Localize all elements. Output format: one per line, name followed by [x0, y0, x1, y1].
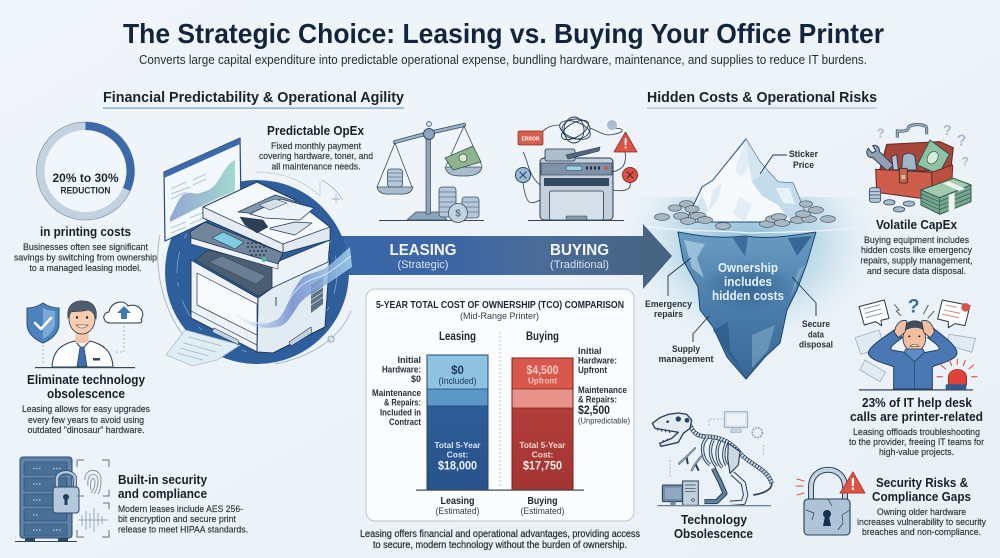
chart title: 5-YEAR TOTAL COST OF OWNERSHIP (TCO) COMPARISON [376, 300, 624, 311]
text: in printing costs: Businesses often see significant [23, 242, 148, 253]
printer paper [166, 330, 240, 366]
stat: donut 20% to 30% reduction: REDUCTION [60, 186, 110, 196]
leasing vs buying arrow [340, 224, 672, 289]
chart title [376, 300, 624, 322]
text: built-in security and compliance: release to meet HIPAA standards. [118, 524, 248, 536]
column headings: Buying [526, 331, 559, 343]
bar: leasing: Total 5-Year [434, 440, 481, 450]
heading: left section: Financial Predictability & Operational Agility [103, 89, 405, 106]
labels: leasing segments: Included in [380, 408, 421, 418]
callout: sticker price [760, 149, 818, 174]
text: eliminate technology obsolescence: outdated "dinosaur" hardware. [28, 425, 144, 436]
text: technology obsolescence: Technology [681, 512, 748, 527]
column headings: Leasing [439, 331, 476, 343]
bar: buying: Upfront [528, 376, 557, 386]
illustration: modern multifunction printer [158, 138, 352, 366]
labels: buying segments: & Repairs: [578, 394, 617, 404]
labels: leasing segments: Maintenance [372, 388, 421, 398]
text: security risks and compliance gaps: Owning older hardware [877, 507, 966, 518]
iceberg water glow [625, 197, 875, 402]
stat: donut 20% to 30% reduction: 20% to 30% [52, 171, 119, 185]
text: built-in security and compliance: Modern leases include AES 256- [118, 504, 243, 515]
labels: buying segments: Upfront [578, 365, 607, 375]
callout: supply management: Supply [672, 344, 701, 355]
analytics panel [164, 138, 241, 241]
labels: leasing segments: Initial [397, 355, 421, 365]
icon: toolbox with cash: ? [957, 133, 967, 150]
text: security risks and compliance gaps: increases vulnerability to security [857, 517, 986, 528]
labels: buying segments [578, 346, 630, 426]
text: in printing costs: in printing costs [40, 224, 131, 239]
text: technology obsolescence [674, 512, 753, 541]
axis labels: (Estimated) [436, 506, 480, 516]
icon: toolbox with cash: ? [943, 123, 952, 139]
bar: leasing: Cost: [447, 450, 469, 460]
icon: dinosaur skeleton and old computer [652, 412, 772, 506]
text: predictable opex: covering hardware, toner, and [259, 151, 373, 162]
icon: cracked padlock with warning [796, 470, 865, 535]
text: security risks and compliance gaps [857, 475, 986, 538]
callout: secure data disposal: data [808, 330, 825, 340]
text: predictable opex: Fixed monthly payment [271, 141, 361, 152]
text: built-in security and compliance [118, 472, 248, 536]
labels: leasing segments: & Repairs: [384, 398, 421, 408]
text: 23% of IT help desk calls: high-value projects. [879, 447, 954, 458]
printer backdrop circle [158, 172, 351, 364]
leasing vs buying arrow: (Traditional) [550, 259, 609, 271]
leasing vs buying arrow: LEASING [390, 242, 456, 259]
iceberg center text [712, 261, 784, 303]
text: technology obsolescence: Obsolescence [674, 526, 753, 541]
text: 23% of IT help desk calls: 23% of IT help desk [862, 395, 973, 410]
text: 23% of IT help desk calls [849, 395, 984, 458]
callout: supply management: management [658, 354, 714, 365]
icon: stressed IT worker: ? [908, 296, 920, 317]
labels: buying segments: Hardware: [578, 356, 617, 366]
text: built-in security and compliance: Built-in security [118, 472, 208, 487]
heading: right section: Hidden Costs & Operational Risks [647, 89, 877, 106]
subtitle: Converts large capital expenditure into predictable operational expense, bundling hardware, maintenance, and supplies to reduce IT burdens. [139, 53, 867, 67]
text: security risks and compliance gaps: breaches and non-compliance. [862, 527, 981, 538]
text: built-in security and compliance: bit encryption and secure print [118, 514, 236, 525]
axis labels [436, 495, 564, 516]
bar: leasing [427, 355, 488, 490]
text: conclusion: to secure, modern technology without the burden of ownership. [373, 540, 627, 551]
icon: toolbox with cash: ? [962, 155, 969, 169]
icon: toolbox with cash [867, 123, 971, 214]
text: predictable opex: all maintenance needs. [272, 162, 360, 172]
axis labels: (Estimated) [520, 506, 564, 516]
text: 23% of IT help desk calls: Leasing offloads troubleshooting [853, 427, 980, 438]
labels: buying segments: (Unpredictable) [578, 416, 630, 426]
iceberg underwater [678, 232, 816, 379]
leasing vs buying arrow: (Strategic) [398, 259, 448, 271]
text: predictable opex: Predictable OpEx [267, 123, 365, 138]
labels: leasing segments [372, 355, 421, 427]
text: eliminate technology obsolescence: Leasing allows for easy upgrades [22, 404, 150, 415]
iceberg center text: includes [724, 275, 772, 289]
icon: technician with shield and cloud [27, 301, 143, 368]
waterline [645, 226, 855, 233]
text: volatile capex [860, 217, 972, 277]
text: eliminate technology obsolescence: obsolescence [47, 386, 125, 401]
icon: balance scale with coins and cash [377, 122, 484, 222]
labels: leasing segments: Hardware: [382, 364, 421, 374]
iceberg center text: hidden costs [712, 289, 784, 303]
text: 23% of IT help desk calls: to the provider, freeing IT teams for [849, 437, 984, 448]
text: security risks and compliance gaps: Compliance Gaps [872, 489, 971, 504]
callout: emergency repairs: repairs [654, 309, 683, 320]
bar: buying: Cost: [532, 450, 554, 460]
text: volatile capex: and secure data disposal. [867, 266, 966, 277]
callout: emergency repairs [645, 258, 693, 320]
callout: secure data disposal: Secure [802, 319, 830, 330]
text: 23% of IT help desk calls: calls are printer-related [850, 409, 983, 424]
flow wave from printer to arrow [233, 247, 352, 328]
icon: server with lock and fingerprint [15, 457, 109, 542]
text: in printing costs: savings by switching from ownership [14, 252, 157, 264]
labels: buying segments: Maintenance [578, 385, 627, 395]
bar: buying: $17,750 [523, 460, 562, 472]
labels: leasing segments: $0 [411, 374, 421, 384]
callout: secure data disposal [792, 277, 833, 350]
text: conclusion: Leasing offers financial and operational advantages, providing access [360, 529, 640, 540]
text: security risks and compliance gaps: Security Risks & [876, 475, 968, 490]
callout: sticker price: Price [793, 160, 814, 171]
bar: leasing: $18,000 [438, 460, 477, 472]
callout: sticker price: Sticker [789, 149, 818, 160]
callout: secure data disposal: disposal [799, 340, 833, 350]
labels: buying segments: $2,500 [578, 403, 610, 417]
callout: supply management [658, 316, 714, 365]
bar: buying: $4,500 [526, 365, 558, 377]
text: volatile capex: Buying equipment includes [864, 235, 969, 246]
bar: buying: Total 5-Year [520, 440, 566, 450]
icon: balance scale with coins and cash: $ [455, 208, 461, 220]
panel: 5-year TCO comparison [366, 289, 634, 521]
icon: troubled printer with tangled wires: ERROR [521, 136, 540, 142]
text: conclusion [360, 529, 640, 551]
icon: troubled printer with tangled wires [516, 116, 638, 221]
bar: leasing: $0 [451, 365, 464, 377]
stat: donut 20% to 30% reduction [36, 122, 134, 220]
bar: buying [512, 358, 573, 490]
callout: emergency repairs: Emergency [645, 299, 693, 310]
text: volatile capex: hidden costs like emergency [861, 245, 972, 256]
text: eliminate technology obsolescence [22, 372, 150, 436]
labels: buying segments: Initial [578, 346, 602, 356]
printer body [190, 182, 330, 353]
column headings [439, 331, 559, 343]
text: eliminate technology obsolescence: Eliminate technology [27, 372, 146, 387]
axis labels: Buying [528, 495, 558, 507]
bar: leasing: (Included) [438, 376, 476, 386]
title: The Strategic Choice: Leasing vs. Buying Your Office Printer [123, 18, 884, 49]
text: volatile capex: repairs, supply management, [860, 256, 972, 266]
icon: stressed IT worker [855, 296, 977, 390]
text: built-in security and compliance: and compliance [118, 486, 207, 501]
chart title: (Mid-Range Printer) [460, 311, 539, 322]
icon: toolbox with cash: ? [877, 127, 885, 141]
text: in printing costs: to a managed leasing model. [30, 263, 142, 274]
iceberg center text: Ownership [718, 261, 778, 275]
leasing vs buying arrow: BUYING [550, 242, 609, 259]
coins at waterline [654, 201, 836, 230]
text: eliminate technology obsolescence: every few years to avoid using [28, 415, 144, 426]
axis labels: Leasing [440, 495, 474, 507]
iceberg tip [688, 139, 807, 222]
text: predictable opex [259, 123, 373, 172]
text: in printing costs [14, 224, 157, 274]
labels: leasing segments: Contract [389, 417, 421, 427]
illustration: iceberg [645, 139, 855, 379]
text: volatile capex: Volatile CapEx [876, 217, 958, 232]
